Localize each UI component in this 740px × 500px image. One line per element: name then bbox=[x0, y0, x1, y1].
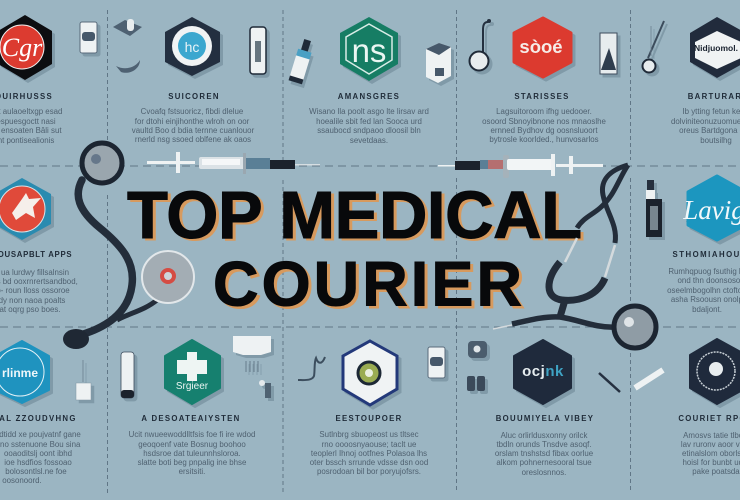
icon: note bbox=[76, 360, 91, 400]
icon: bandage set bbox=[233, 336, 271, 398]
text block: dy non naoa poalts bbox=[0, 296, 65, 305]
icon: car bbox=[428, 347, 445, 378]
text block: dtidd xe poujvatnf gane bbox=[0, 430, 81, 439]
text block bbox=[495, 431, 594, 477]
text block: boutsilhg bbox=[700, 136, 732, 145]
text block bbox=[667, 267, 740, 314]
text block bbox=[0, 430, 81, 485]
icon: red badge: Cgr bbox=[2, 33, 43, 62]
icon: barcode tube bbox=[250, 27, 266, 74]
icon: small car bbox=[80, 22, 97, 53]
text block: rno oooosnyaouse; taclt ue bbox=[322, 440, 417, 449]
panel: top 1 bbox=[0, 15, 97, 145]
text block: osoord Sbnoyibnone nos mnaoslhe bbox=[482, 117, 606, 126]
text block: Wisano lla poolt asgo lte lirsav ard bbox=[309, 107, 429, 116]
text block: Aluc orlirldusxonny orilck bbox=[501, 431, 587, 440]
icon: right stethoscope bbox=[493, 165, 656, 348]
icon: instrument bbox=[642, 21, 664, 72]
heading: AMANSGRES bbox=[338, 92, 400, 101]
heading: STARISSES bbox=[514, 92, 570, 101]
text block: alkom pohnernesooral tsue bbox=[496, 458, 592, 467]
text block bbox=[681, 431, 740, 476]
icon: teal badge bbox=[165, 340, 220, 404]
text block: oter bssch srrunde vdsse dsn ood bbox=[310, 458, 428, 467]
text block: slatte boti beg pnpalig ine bhse bbox=[138, 458, 247, 467]
text block: posrodoan bil bor poryujofsrs. bbox=[317, 467, 421, 476]
icon: teal badge: Srgieer bbox=[176, 381, 209, 392]
icon: ns badge: ns bbox=[352, 32, 386, 69]
text block: at oqrg pso boes. bbox=[0, 305, 60, 314]
icon: syringe small bbox=[635, 370, 663, 388]
icon: OCINK badge bbox=[514, 340, 571, 404]
text block: Ucit nwueewoddlltfsis foe fi ire wdod bbox=[129, 430, 255, 439]
panel: bottom 4 bbox=[467, 340, 620, 477]
icon: pills bbox=[113, 19, 142, 73]
text block bbox=[0, 268, 78, 314]
text block: bdaljont. bbox=[692, 305, 722, 314]
text block: ioe hsdfios fossoao bbox=[4, 458, 72, 467]
text block bbox=[132, 107, 255, 144]
icon: camera box bbox=[467, 341, 487, 391]
icon: document tube bbox=[600, 33, 617, 74]
text block bbox=[310, 430, 428, 476]
icon: emblem badge bbox=[690, 339, 740, 404]
icon: tube bbox=[121, 352, 134, 398]
panel: bottom 1 bbox=[0, 341, 91, 485]
icon: small stethoscope bbox=[470, 19, 491, 70]
heading: A DESOATEAIYSTEN bbox=[141, 414, 241, 423]
title: TOP MEDICAL bbox=[127, 178, 582, 253]
icon: hook bbox=[298, 357, 325, 380]
icon: sooe badge bbox=[514, 18, 571, 77]
text block bbox=[671, 107, 740, 145]
panel: top 2 bbox=[113, 17, 266, 144]
text block: teoplerl Ihnoj ootfnes Polasoa lhs bbox=[311, 449, 427, 458]
panel: bottom 3 bbox=[298, 341, 445, 476]
text block: bolosontlsl.ne foe bbox=[5, 467, 67, 476]
icon: left stethoscope bbox=[63, 143, 194, 349]
icon: red app badge bbox=[0, 178, 51, 240]
text block: orslam tnshstsd fibax oorlue bbox=[495, 449, 594, 458]
text block: oosonoord. bbox=[2, 476, 42, 485]
text block: bytrosle koorlded., hunvosarlos bbox=[489, 135, 599, 144]
title: COURIER bbox=[213, 250, 522, 320]
text block bbox=[129, 430, 255, 476]
heading: AL ZZOUDVHNG bbox=[0, 414, 77, 423]
title: TOP MEDICAL bbox=[130, 180, 585, 255]
icon: hc badge bbox=[165, 17, 220, 76]
panel: middle right bbox=[646, 176, 740, 314]
text block: Cvoafq fstsuoricz, fibdi dlelue bbox=[141, 107, 244, 116]
text block: oreslosnnos. bbox=[522, 468, 566, 477]
icon: pen bbox=[599, 373, 620, 392]
text block: Lagsuitoroom ifhg uedooer. bbox=[496, 107, 592, 116]
panel: bottom 5 bbox=[635, 339, 740, 476]
icon: left syringe bbox=[147, 152, 320, 174]
text block: rnerld nsg ssoed oblfene ak oaos bbox=[135, 135, 251, 144]
text block: vaultd Boo d bdia ternne cuanlouor bbox=[132, 126, 255, 135]
text block: ssaubocd sndpaoo dloosil bln bbox=[317, 126, 421, 135]
icon: hc badge: hc bbox=[185, 39, 199, 55]
text block: ernned Bydhov dg oosnsluoort bbox=[490, 126, 598, 135]
panel: top 5 bbox=[642, 17, 740, 145]
icon: sooe badge: sòoé bbox=[519, 36, 563, 57]
panel: top 3 bbox=[289, 17, 451, 145]
text block bbox=[309, 107, 429, 145]
text block: hsdsroe dat tuleunnhsloroa. bbox=[143, 449, 241, 458]
text block: ooaoditslj oont ibhd bbox=[4, 449, 72, 458]
panel: middle left bbox=[0, 178, 78, 314]
icon: blue badge bbox=[0, 341, 49, 403]
text block bbox=[482, 107, 606, 144]
title bbox=[127, 178, 585, 322]
text block: for dtohi einjihonthe wlroh on oor bbox=[135, 117, 250, 126]
text block: hoealile sbit fed lan Sooca urd bbox=[316, 117, 422, 126]
icon: navy badge: Nidjuomol. bbox=[694, 43, 738, 53]
heading: SUICOREN bbox=[168, 92, 220, 101]
text block: tbdln orunds Tnsdve asoqf. bbox=[496, 440, 592, 449]
icon: vial bbox=[646, 180, 662, 237]
text block: Sutlnbrg sbuopeost us tltsec bbox=[319, 430, 419, 439]
text block: geoqoenf vate Bosnug boohoo bbox=[138, 440, 246, 449]
text block bbox=[0, 107, 62, 145]
icon: box bbox=[426, 43, 451, 83]
text block: pake poatsda bbox=[692, 467, 740, 476]
icon: bottle bbox=[289, 38, 315, 84]
text block: ersitsiti. bbox=[179, 467, 205, 476]
heading: EESTOUPOER bbox=[335, 414, 403, 423]
text block: ua lurdwy fillsalnsin bbox=[1, 268, 69, 277]
icon: right syringe bbox=[438, 154, 603, 178]
text block: sevetdaas. bbox=[350, 136, 388, 145]
heading: BOUUMIYELA VIBEY bbox=[496, 414, 594, 423]
icon: ns badge bbox=[340, 17, 398, 81]
icon: logo badge bbox=[343, 341, 397, 405]
panel: top 4 bbox=[470, 18, 617, 144]
icon: OCINK badge: ocjnk bbox=[522, 363, 564, 380]
icon: blue badge: rlinme bbox=[2, 366, 38, 380]
panel: bottom 2 bbox=[121, 336, 271, 476]
title: COURIER bbox=[216, 252, 525, 322]
